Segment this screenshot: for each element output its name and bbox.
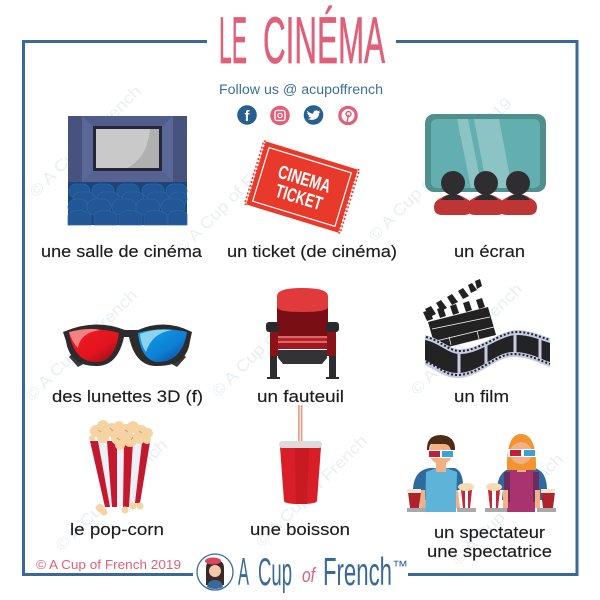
- label: une spectatrice: [427, 542, 552, 561]
- watermarks: © A Cup of French: [173, 140, 291, 258]
- icon: drink cup with straw: [279, 405, 322, 504]
- logo wordmark: A: [238, 551, 249, 594]
- icon: cinema hall: [68, 116, 187, 225]
- watermarks: © A Cup of French: [209, 283, 327, 401]
- icon: pinterest: [338, 106, 358, 125]
- label: un film: [454, 387, 509, 406]
- watermarks: [23, 83, 567, 569]
- icon: cinema seat: [266, 288, 339, 379]
- icon: cinema ticket: [245, 141, 359, 233]
- title: [219, 3, 385, 77]
- icon: twitter: [304, 105, 323, 125]
- watermarks: © A Cup of French: [408, 281, 526, 399]
- logo wordmark: ™: [392, 558, 408, 575]
- icon: facebook: f: [244, 108, 250, 125]
- icon: popcorn: [89, 420, 153, 516]
- watermarks: © A Cup of French: [253, 433, 371, 551]
- logo wordmark: of: [302, 565, 317, 587]
- icon: cinema ticket: TICKET: [273, 181, 325, 215]
- label: un écran: [454, 242, 525, 261]
- label: un ticket (de cinéma): [227, 242, 397, 261]
- logo wordmark: French: [323, 551, 392, 594]
- logo wordmark: [238, 551, 408, 594]
- logo badge: [197, 554, 233, 590]
- title: LE: [219, 3, 247, 77]
- boy spectator: [407, 435, 476, 512]
- watermarks: © A Cup of French: [23, 287, 141, 405]
- watermarks: © A Cup of French: [53, 437, 171, 555]
- label: des lunettes 3D (f): [52, 387, 203, 406]
- label: une boisson: [250, 520, 350, 539]
- icon: clapperboard and film strip: [423, 279, 550, 378]
- icon: 3D glasses: [63, 324, 192, 367]
- girl spectator: [485, 434, 556, 512]
- social icons: [237, 105, 358, 125]
- label: un spectateur: [434, 523, 545, 542]
- watermarks: © A Cup of French 2019: [366, 95, 516, 245]
- follow us text: Follow us @ acupoffrench: [219, 82, 383, 97]
- label: le pop-corn: [70, 520, 164, 539]
- icon: instagram: [270, 106, 290, 125]
- watermarks: © A Cup of French: [27, 83, 145, 201]
- watermarks: © A Cup of French: [449, 451, 567, 569]
- text: CINÉMA: [263, 3, 385, 77]
- label: un fauteuil: [257, 387, 344, 406]
- label: une salle de cinéma: [41, 242, 203, 261]
- logo wordmark: Cup: [258, 551, 292, 594]
- icon: screen with audience: [425, 114, 546, 215]
- icon: cinema ticket: CINEMA: [275, 162, 333, 198]
- icon: spectators: [407, 434, 556, 512]
- copyright: © A Cup of French 2019: [36, 557, 181, 572]
